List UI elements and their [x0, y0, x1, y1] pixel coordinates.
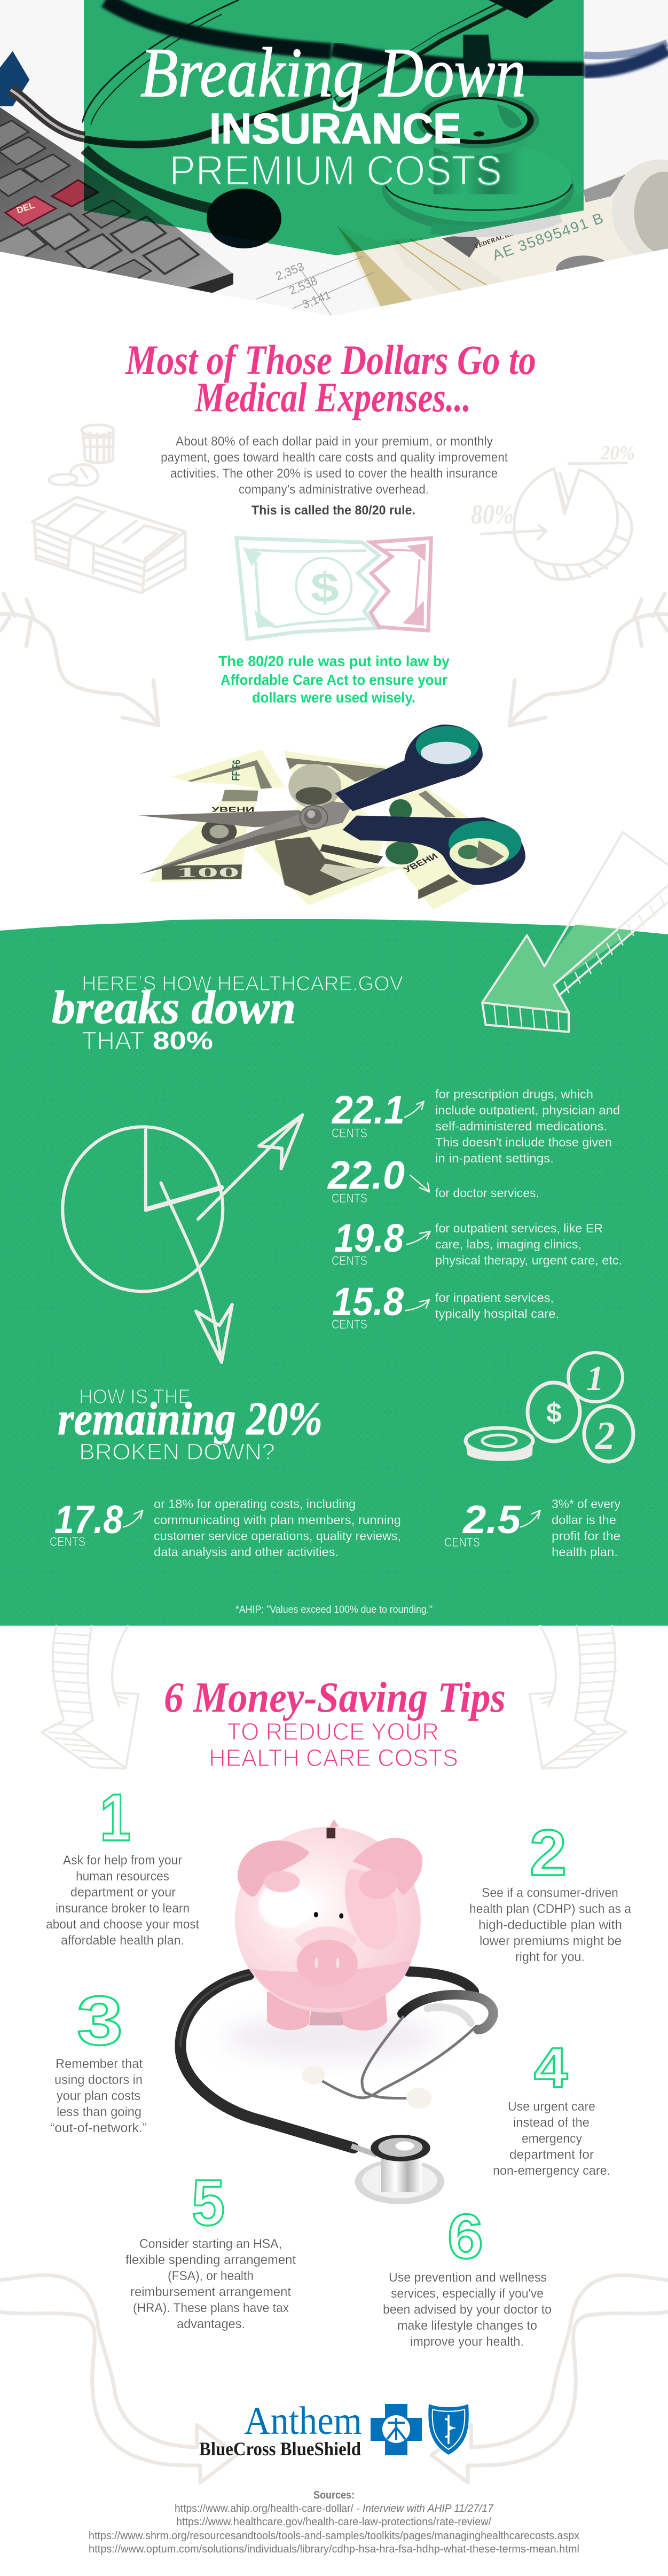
tip 6 text: improve your health.	[410, 2335, 524, 2349]
number 6: 6	[447, 2202, 483, 2272]
tip 5 text: (HRA). These plans have tax	[133, 2301, 289, 2315]
arrow	[521, 1510, 540, 1527]
tip 5 text: flexible spending arrangement	[125, 2253, 296, 2267]
arrow: left hatched decorative	[42, 1626, 138, 1769]
green text about the law: The 80/20 rule was put into law by	[218, 653, 450, 669]
cents label: CENTS	[50, 1535, 85, 1549]
top handle	[335, 724, 483, 811]
description: 3%* of every	[552, 1497, 620, 1511]
footnote: *AHIP: "Values exceed 100% due to rounding."	[235, 1604, 433, 1615]
description	[435, 1087, 620, 1165]
description: physical therapy, urgent care, etc.	[435, 1253, 622, 1267]
tip 2 text: lower premiums might be	[480, 1934, 622, 1948]
coin dollar	[528, 1383, 580, 1441]
source links: https://www.optum.com/solutions/individuals/library/cdhp-hsa-hra-fsa-hdhp-what-these-terms-mean.html	[89, 2543, 579, 2555]
pig legs	[267, 1992, 311, 2030]
tip 2 text	[469, 1886, 632, 1964]
description: for prescription drugs, which	[435, 1087, 593, 1101]
arrow: right curved decorative	[509, 594, 668, 725]
description: or 18% for operating costs, including	[154, 1497, 356, 1511]
tip 3 text: less than going	[57, 2105, 142, 2119]
tip 4 text: department for	[509, 2148, 594, 2162]
label 20%: 20%	[600, 442, 635, 464]
tip 3	[50, 1981, 147, 2135]
wordmark BlueCross BlueShield: BlueCross BlueShield	[199, 2438, 361, 2460]
logo: Anthem Blue Cross Blue Shield	[199, 2399, 469, 2460]
heading line: BROKEN DOWN?	[79, 1439, 275, 1465]
tip 1	[46, 1781, 199, 1948]
photo: bank notes: AE 35895491 B	[490, 209, 606, 263]
description: This doesn't include those given	[435, 1135, 612, 1149]
description	[435, 1291, 559, 1321]
description: in in-patient settings.	[435, 1151, 554, 1165]
stat: 15.8 cents	[332, 1279, 559, 1332]
tip 1 text: affordable health plan.	[61, 1933, 184, 1948]
icon: coins	[466, 1353, 633, 1462]
photo: calculator: DEL	[15, 200, 36, 216]
decorative sketch: pie chart with 20% and 80%	[471, 442, 635, 579]
bill pieces: УВЕНИ	[211, 806, 255, 814]
chest piece	[351, 2135, 444, 2204]
tip 5 text: advantages.	[177, 2317, 245, 2331]
green part of bill: $	[311, 565, 339, 611]
tip 1 text: Ask for help from your	[63, 1853, 182, 1868]
tip 2 text: health plan (CDHP) such as a	[469, 1902, 632, 1916]
arrow	[406, 1300, 429, 1310]
tip 4 text	[493, 2099, 610, 2178]
bottom handle	[343, 816, 525, 885]
hero photo with green banner	[0, 0, 668, 321]
description: communicating with plan members, running	[154, 1513, 401, 1527]
source links: https://www.healthcare.gov/health-care-law-protections/rate-review/	[176, 2516, 491, 2528]
arrow	[405, 1102, 424, 1118]
coin 1	[568, 1353, 623, 1402]
cents label: CENTS	[332, 1126, 367, 1141]
description: care, labs, imaging clinics,	[435, 1237, 581, 1251]
tip 1 text: department or your	[70, 1885, 176, 1900]
heading line one: Most of Those Dollars Go to	[124, 337, 536, 383]
stat: 17.8 cents	[50, 1497, 401, 1559]
description: for doctor services.	[435, 1186, 539, 1200]
arrow	[123, 1510, 143, 1527]
tip 5 text: (FSA), or health	[168, 2269, 254, 2283]
soft shadow	[224, 2017, 438, 2059]
number 1: 1	[100, 1781, 131, 1855]
icon: torn dollar bill	[237, 538, 431, 639]
number 5: 5	[192, 2166, 225, 2239]
coin 3 lying flat	[466, 1428, 533, 1461]
stat: 17.8 cents: 17.8	[54, 1497, 123, 1542]
photo: spreadsheet: 2,538	[287, 274, 319, 298]
heading line: HOW IS THE	[79, 1386, 191, 1408]
tip 4 text: instead of the	[513, 2116, 590, 2130]
arrow	[407, 1231, 430, 1244]
photo: spreadsheet: 3,141	[301, 288, 333, 311]
cents label: CENTS	[332, 1191, 367, 1206]
green text about the law: Affordable Care Act to ensure your	[221, 672, 447, 688]
description: dollar is the	[552, 1513, 616, 1527]
description	[435, 1221, 622, 1267]
coin dollar: $	[546, 1398, 562, 1428]
description: typically hospital care.	[435, 1307, 559, 1321]
intro paragraph: activities. The other 20% is used to cover the health insurance	[170, 466, 498, 481]
tip 2 text: See if a consumer-driven	[482, 1886, 618, 1900]
description: self-administered medications.	[435, 1119, 607, 1133]
heading: how is the remaining 20% broken down	[58, 1386, 323, 1465]
intro paragraph: This is called the 80/20 rule.	[252, 503, 415, 518]
tip 2 text: right for you.	[515, 1950, 585, 1964]
description: include outpatient, physician and	[435, 1103, 620, 1117]
tip 6 text: Use prevention and wellness	[389, 2270, 547, 2285]
arrow: bottom right decorative	[431, 2275, 668, 2483]
description: customer service operations, quality reviews,	[154, 1529, 401, 1543]
arrow: bottom left decorative	[0, 2275, 237, 2483]
ears	[238, 1840, 309, 1896]
label 80%: 80%	[471, 499, 514, 530]
pink part of bill	[371, 538, 431, 630]
cents label: CENTS	[444, 1535, 480, 1550]
number 2: 2	[530, 1816, 567, 1889]
intro paragraph: payment, goes toward health care costs and quality improvement	[161, 450, 508, 465]
face highlight	[258, 1882, 313, 1928]
description: profit for the	[552, 1529, 620, 1543]
subheading line one: TO REDUCE YOUR	[227, 1718, 439, 1745]
tip 4 text: emergency	[522, 2132, 582, 2146]
description: data analysis and other activities.	[154, 1545, 339, 1559]
coin 2	[584, 1406, 633, 1462]
subheading line two: HEALTH CARE COSTS	[209, 1744, 458, 1771]
stat: 22.1 cents: 22.1	[331, 1088, 405, 1132]
green text about the law: dollars were used wisely.	[252, 689, 415, 706]
stat: 19.8 cents	[332, 1216, 622, 1268]
tip 1 text	[46, 1853, 199, 1948]
heading line two: Medical Expenses...	[194, 374, 471, 420]
photo: bank notes	[336, 160, 668, 311]
tip 5 text: Consider starting an HSA,	[139, 2237, 282, 2251]
heading: money-saving tips	[164, 1674, 506, 1771]
back tube	[180, 1971, 493, 2148]
stat: 2.5 cents: 2.5	[462, 1497, 522, 1542]
photo: spreadsheet: 2,353	[274, 260, 306, 283]
chart icon: sketched pie chart with arrows	[62, 1115, 302, 1362]
sources	[89, 2489, 579, 2555]
heading: most of those dollars	[124, 337, 536, 420]
stat: 19.8 cents: 19.8	[334, 1216, 404, 1260]
blue shield icon	[428, 2404, 469, 2455]
photo: paper backdrop	[1, 52, 613, 236]
heading line: here's how: HERE’S HOW HEALTHCARE.GOV	[82, 972, 403, 995]
stat: 22.1 cents	[331, 1087, 620, 1165]
tip 4	[493, 2036, 610, 2178]
number 4: 4	[534, 2036, 568, 2099]
stat: 2.5 cents	[444, 1497, 620, 1559]
nostril dots	[314, 1912, 318, 1917]
photo: bank notes: FEDERAL RESERVE NOTE	[474, 217, 552, 250]
bill pieces: УВЕНИ	[402, 852, 440, 874]
description	[552, 1497, 620, 1559]
source links: https://www.ahip.org/health-care-dollar/ - Interview with AHIP 11/27/17	[175, 2503, 494, 2515]
stat: 22.0 cents	[327, 1153, 539, 1206]
tip 6 text: services, especially if you've	[391, 2286, 544, 2301]
tip 6	[383, 2202, 552, 2349]
arrow: right hatched decorative	[530, 1626, 626, 1769]
heading line: that 80%: 80%	[153, 1026, 213, 1055]
cents label: CENTS	[332, 1254, 367, 1268]
photo: calculator	[0, 107, 233, 293]
panel: green breakdown section	[0, 919, 668, 1626]
tip 4 text: non-emergency care.	[493, 2164, 610, 2178]
cents label: CENTS	[332, 1317, 367, 1332]
heading line: that 80%	[82, 1026, 213, 1055]
tip 2 text: high-deductible plan with	[478, 1918, 622, 1932]
ear tips	[302, 2065, 325, 2085]
tip 3 text: Remember that	[56, 2057, 143, 2071]
big arrow pointing down left	[482, 832, 668, 1032]
wordmark Anthem: Anthem	[244, 2399, 362, 2443]
tip 6 text	[383, 2270, 552, 2349]
green banner overlay	[84, 0, 584, 255]
number 3: 3	[77, 1981, 123, 2059]
decorative sketches: coins	[49, 425, 113, 486]
arrow: left curved decorative	[0, 594, 159, 725]
heading script: remaining 20%	[58, 1393, 323, 1445]
title line: Breaking Down: Breaking Down	[140, 33, 526, 112]
intro paragraph: company’s administrative overhead.	[239, 482, 429, 497]
tip 1 text: human resources	[76, 1869, 169, 1884]
green text about the law	[218, 653, 450, 706]
photo: stethoscope	[0, 0, 667, 248]
green part of bill	[237, 538, 379, 639]
tip 3 text: “out-of-network.”	[50, 2121, 147, 2135]
heading script: 6 Money-Saving Tips	[164, 1674, 506, 1721]
tip 3 text: using doctors in	[54, 2073, 143, 2087]
title	[140, 33, 526, 194]
blades	[138, 801, 353, 875]
bill pieces: FF F6	[230, 760, 243, 781]
pig body	[235, 1827, 421, 2012]
photo: piggy bank with stethoscope	[180, 1820, 493, 2204]
tip 5 text: reimbursement arrangement	[130, 2285, 291, 2299]
metal tubes	[321, 2007, 476, 2098]
tip 3 text	[50, 2057, 147, 2135]
eye hollows	[264, 1871, 300, 1892]
bill pieces: 100	[176, 865, 239, 880]
tip 6 text: make lifestyle changes to	[397, 2319, 537, 2333]
source links	[89, 2503, 579, 2555]
heading script: breaks down: breaks down	[52, 982, 296, 1034]
description: for outpatient services, like ER	[435, 1221, 603, 1235]
description: health plan.	[552, 1545, 618, 1559]
photo: scissors cutting hundred dollar bill	[138, 724, 525, 910]
tip 5	[125, 2166, 296, 2331]
tip 5 text	[125, 2237, 296, 2331]
intro paragraph	[161, 434, 508, 518]
tip 2	[469, 1816, 632, 1964]
heading: here's how healthcare.gov breaks down that 80%	[52, 972, 403, 1055]
snout	[294, 1926, 358, 1949]
coin 2: 2	[595, 1414, 615, 1458]
tip 1 text: about and choose your most	[46, 1917, 199, 1932]
coin 1: 1	[586, 1359, 604, 1398]
ear tip	[207, 189, 281, 248]
photo: spreadsheet	[256, 256, 374, 315]
title line: Premium Costs: PREMIUM COSTS	[169, 146, 502, 194]
intro paragraph: About 80% of each dollar paid in your premium, or monthly	[176, 434, 493, 449]
bill pieces	[148, 750, 476, 910]
arrow	[410, 1175, 429, 1192]
description	[154, 1497, 401, 1559]
stat: 15.8 cents: 15.8	[332, 1279, 404, 1324]
decorative sketch: stack of money	[32, 497, 185, 593]
title line: Insurance: INSURANCE	[209, 105, 461, 152]
source links: https://www.shrm.org/resourcesandtools/tools-and-samples/toolkits/pages/managinghealthcarecosts.aspx	[89, 2530, 579, 2542]
blue cross icon	[371, 2404, 422, 2455]
tip 1 text: insurance broker to learn	[56, 1901, 190, 1916]
tip 3 text: your plan costs	[57, 2089, 140, 2103]
heading line: that 80%: THAT	[82, 1026, 145, 1055]
slot	[327, 1828, 335, 1838]
tip 6 text: been advised by your doctor to	[383, 2302, 552, 2317]
tip 4 text: Use urgent care	[508, 2099, 595, 2114]
stat: 22.0 cents: 22.0	[327, 1153, 405, 1197]
description: for inpatient services,	[435, 1291, 554, 1305]
sources heading: Sources:	[313, 2489, 355, 2501]
